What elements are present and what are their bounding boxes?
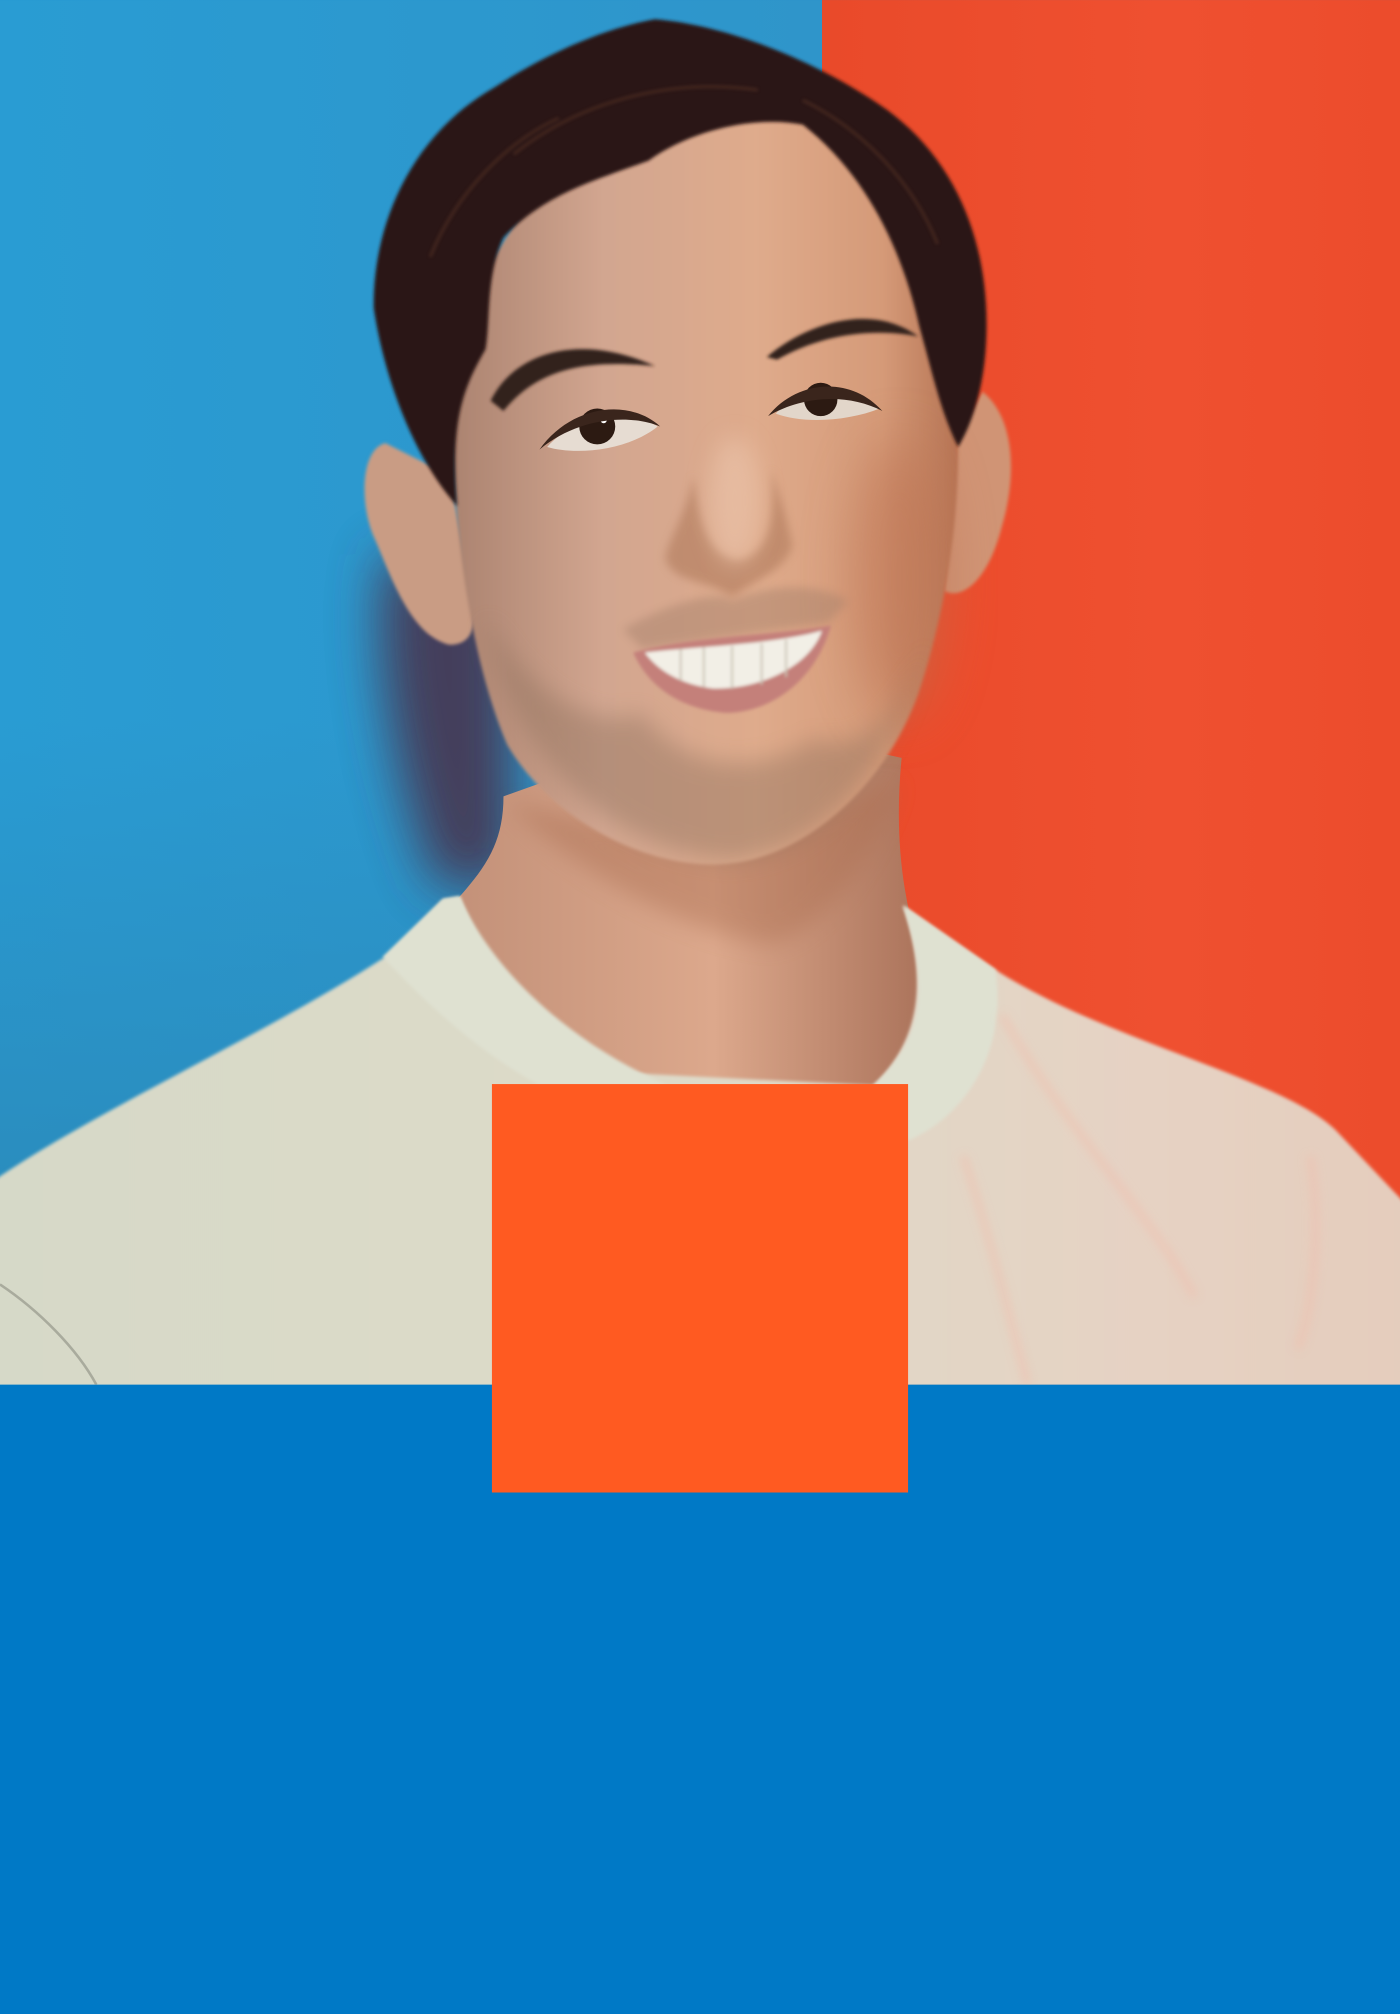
- left ear: [365, 443, 474, 645]
- nose: [665, 469, 792, 597]
- shirt seam left: [0, 1284, 96, 1385]
- right ear: [944, 392, 1011, 593]
- moustache shadow: [623, 587, 848, 649]
- hair: [374, 19, 987, 506]
- left eye: [539, 408, 660, 451]
- photo backdrop: orange half: [822, 0, 1400, 1385]
- face: [452, 113, 958, 864]
- hair highlights: [430, 87, 938, 257]
- neck: [458, 754, 918, 1084]
- t-shirt: [0, 894, 1400, 1385]
- orange square: [492, 1084, 908, 1493]
- nose bridge highlight: [709, 437, 760, 565]
- right eye: [768, 383, 882, 420]
- mouth: [633, 626, 831, 713]
- cheek warmth: [854, 437, 944, 719]
- left eyebrow: [491, 349, 655, 411]
- shirt collar: [383, 897, 998, 1141]
- right eyebrow: [767, 319, 918, 360]
- blue page background: [0, 1385, 1400, 2014]
- portrait poster: [0, 0, 1400, 1492]
- stubble: [496, 648, 901, 865]
- shadow behind head: [380, 552, 514, 886]
- shirt fold lines: [996, 1270, 1026, 1376]
- photo backdrop: blue half: [0, 0, 822, 1178]
- neck shadow under jaw: [524, 800, 876, 945]
- photo: portrait of smiling man: [0, 0, 1400, 1451]
